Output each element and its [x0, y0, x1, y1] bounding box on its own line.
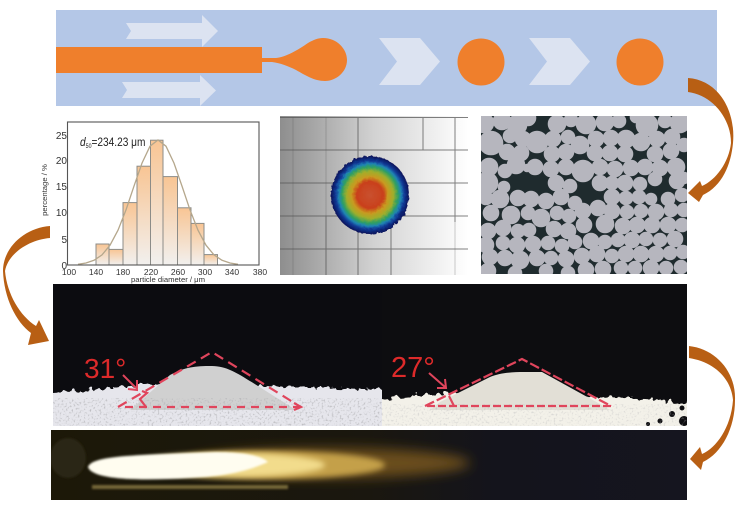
panel: droplet formation process [56, 10, 717, 106]
y axis labels: 25 [56, 131, 67, 142]
arrow: chevron one [379, 38, 440, 85]
x axis labels: 380 [253, 267, 267, 277]
powder grain texture [53, 398, 382, 426]
panel: droplet simulation [280, 116, 468, 275]
x axis title: particle diameter / μm [131, 275, 205, 284]
droplet two [616, 38, 664, 86]
y axis labels: 15 [56, 182, 67, 193]
panel: particle micrograph [475, 111, 690, 279]
x axis labels: 260 [171, 267, 185, 277]
x axis labels: 300 [198, 267, 212, 277]
d50 annotation: =234.23 μm [92, 136, 145, 149]
histogram bars [96, 140, 218, 265]
powder bed [382, 391, 687, 426]
powder pile [430, 372, 610, 410]
simulated droplet heat map [331, 156, 409, 234]
label: 31 degrees: 31° [84, 353, 126, 384]
flame core [88, 452, 268, 479]
droplet one [458, 38, 504, 86]
x axis labels: 180 [116, 267, 130, 277]
plot frame [68, 122, 259, 265]
orange liquid jet and forming droplet [56, 38, 347, 81]
photo: angle of repose 27 degrees [382, 284, 687, 426]
arrow: curved from chart to angle of repose photos [3, 226, 50, 345]
dashed angle outline [425, 359, 611, 406]
x axis labels [62, 267, 267, 277]
powder grain texture [382, 404, 687, 426]
arrow to angle [123, 375, 137, 390]
burner nozzle [50, 438, 86, 478]
label: 27 degrees: 27° [391, 352, 435, 384]
arrow: upper air flow [126, 15, 218, 47]
powder bed [53, 382, 382, 426]
powder pile [130, 366, 296, 410]
y axis labels [56, 131, 67, 272]
y axis labels: 5 [61, 235, 67, 246]
arrow: lower air flow [122, 75, 216, 106]
scattered grains and gaps at the pile edge [646, 406, 689, 426]
d50 annotation: 50 [86, 144, 92, 150]
fitted distribution curve [78, 140, 238, 264]
x axis labels: 340 [225, 267, 239, 277]
y axis labels: 20 [56, 156, 67, 167]
arrow to angle [429, 373, 446, 388]
arrow: curved from photos to flame [689, 346, 735, 470]
dashed angle outline [118, 352, 301, 410]
x axis labels: 140 [89, 267, 103, 277]
x axis labels: 220 [144, 267, 158, 277]
chart: particle size distribution [40, 122, 267, 284]
y axis title: percentage / % [40, 164, 49, 216]
y axis labels: 0 [61, 261, 67, 272]
d50 annotation: d [80, 136, 87, 149]
x axis labels: 100 [62, 267, 76, 277]
photo: flame [50, 430, 687, 500]
photo: angle of repose 31 degrees [53, 284, 382, 426]
lower streak [92, 485, 288, 489]
arrow: chevron two [529, 38, 590, 85]
flame outer glow [190, 448, 470, 478]
y axis labels: 10 [56, 208, 67, 219]
arrow: curved from droplets to particles [688, 78, 733, 202]
